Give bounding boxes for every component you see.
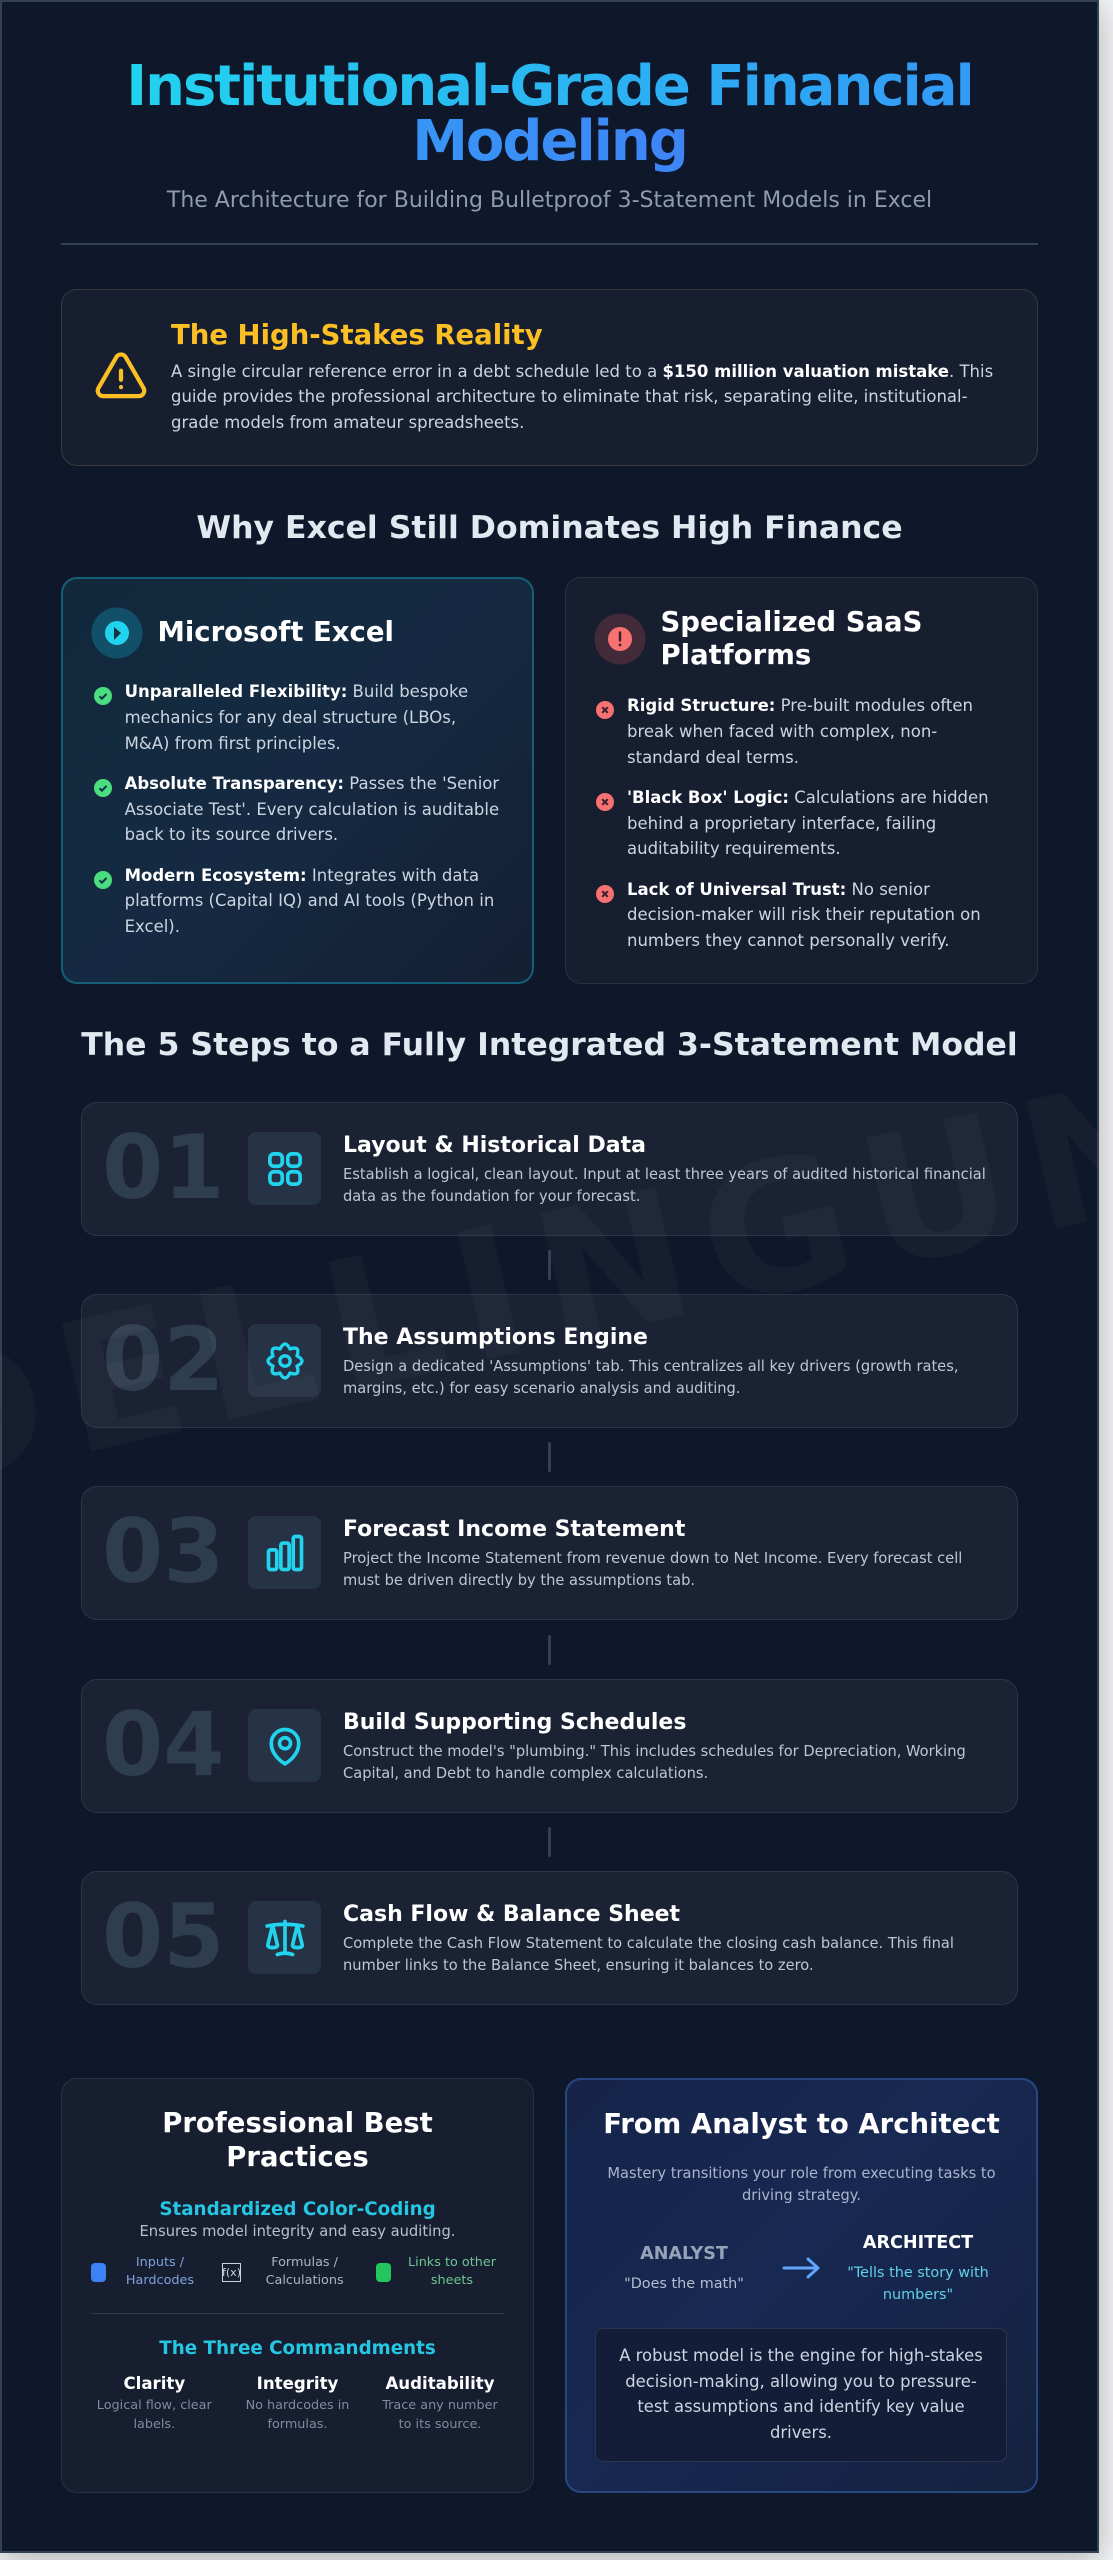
- step description: margins, etc.) for easy scenario analysis and auditing.: [343, 1380, 741, 1397]
- item: unparalleled flexibility: mechanics for any deal structure (LBOs,: [125, 708, 456, 727]
- heading: from analyst to architect: From Analyst to Architect: [603, 2108, 1000, 2140]
- text: tells the story: "Tells the story with: [847, 2265, 989, 2281]
- step description: data as the foundation for your forecast.: [343, 1188, 640, 1205]
- number 04: 04: [102, 1693, 224, 1796]
- heading: why excel still dominates: Why Excel Still Dominates High Finance: [196, 510, 903, 546]
- icon: excel badge: [92, 608, 142, 658]
- step 4: [81, 1679, 1018, 1813]
- legend label: inputs: Inputs /: [136, 2255, 184, 2270]
- arrow: analyst to architect: [782, 2257, 820, 2279]
- item: absolute transparency: Absolute Transparency: Passes the 'Senior: [125, 774, 499, 793]
- panel: specialized saas platforms: [565, 577, 1038, 984]
- item: rigid structure: break when faced with complex, non-: [627, 722, 937, 741]
- commandment: clarity: Clarity: [123, 2374, 185, 2393]
- panel: professional best practices: [61, 2078, 534, 2493]
- step title: Cash Flow & Balance Sheet: [343, 1902, 680, 1926]
- step description: Establish a logical, clean layout. Input at least three years of audited historical financial: [343, 1166, 986, 1183]
- step title: Build Supporting Schedules: [343, 1710, 686, 1734]
- heading: specialized saas platforms: [660, 606, 922, 671]
- step title: Layout & Historical Data: [343, 1132, 646, 1158]
- subheading: the three commandments: The Three Commandments: [159, 2338, 436, 2359]
- item: unparalleled flexibility: M&A) from first principles.: [125, 734, 341, 753]
- text: ensures model integrity: Ensures model integrity and easy auditing.: [140, 2223, 455, 2240]
- item: black box logic: [596, 788, 989, 858]
- commandment: auditability: Auditability: [385, 2374, 495, 2393]
- text: tells the story: numbers": [883, 2287, 953, 2303]
- text: tells the story: [847, 2265, 989, 2303]
- legend label: inputs: Hardcodes: [126, 2273, 194, 2288]
- legend icon: formula box: [222, 2263, 241, 2282]
- commandment text: auditability: [382, 2398, 498, 2432]
- legend label: links: sheets: [431, 2273, 473, 2288]
- number 03: 03: [102, 1500, 224, 1603]
- icon: warning triangle: [96, 352, 146, 398]
- callout: robust model: test assumptions and identify key value: [637, 2397, 965, 2416]
- callout: robust model: A robust model is the engine for high-stakes: [619, 2346, 983, 2365]
- item: unparalleled flexibility: [94, 682, 468, 753]
- subheading: standardized color-coding: Standardized Color-Coding: [159, 2199, 436, 2220]
- step description: Complete the Cash Flow Statement to calculate the closing cash balance. This final: [343, 1935, 954, 1952]
- item: lack of universal trust: Lack of Universal Trust: No senior: [627, 880, 930, 899]
- callout: robust model: decision-making, allowing you to pressure-: [625, 2372, 977, 2391]
- step description: Design a dedicated 'Assumptions' tab. This centralizes all key drivers (growth rates,: [343, 1358, 958, 1375]
- item: modern ecosystem: [94, 866, 494, 936]
- callout: robust model: [595, 2328, 1007, 2462]
- item: rigid structure: Rigid Structure: Pre-built modules often: [627, 696, 973, 715]
- commandment text: clarity: [97, 2398, 212, 2432]
- legend icon: formula box: f(x): [222, 2266, 241, 2279]
- icon: gear: [248, 1324, 321, 1397]
- title: Modeling: [412, 109, 687, 174]
- item: lack of universal trust: [596, 880, 981, 950]
- commandment text: integrity: [246, 2398, 349, 2432]
- commandment text: auditability: Trace any number: [382, 2398, 498, 2413]
- item: lack of universal trust: numbers they cannot personally verify.: [627, 931, 950, 950]
- item: lack of universal trust: decision-maker will risk their reputation on: [627, 905, 981, 924]
- legend label: links: [408, 2255, 496, 2288]
- step description: Capital, and Debt to handle complex calculations.: [343, 1765, 708, 1782]
- step 5: [81, 1871, 1018, 2005]
- step description: [343, 1166, 986, 1205]
- step description: must be driven directly by the assumptions tab.: [343, 1572, 695, 1589]
- label: architect: ARCHITECT: [863, 2233, 973, 2253]
- number 01: 01: [102, 1116, 224, 1219]
- heading: specialized saas platforms: Specialized SaaS: [660, 606, 922, 638]
- heading: specialized saas platforms: Platforms: [660, 639, 811, 671]
- number 05: 05: [102, 1885, 224, 1988]
- panel: the high-stakes reality: [61, 289, 1038, 466]
- icon: saas warning badge: [594, 614, 646, 664]
- heading: microsoft excel: Microsoft Excel: [158, 616, 394, 648]
- heading: professional best practices: Professional Best: [162, 2107, 433, 2139]
- item: unparalleled flexibility: Unparalleled Flexibility: Build bespoke: [125, 682, 468, 701]
- text: reality description: A single circular reference error in a debt schedule led to a $150 million valuation mistake. This: [171, 362, 993, 380]
- label: analyst: ANALYST: [640, 2244, 728, 2264]
- heading: the 5 steps: The 5 Steps to a Fully Integrated 3-Statement Model: [81, 1027, 1018, 1063]
- panel: microsoft excel: [61, 577, 534, 984]
- item: rigid structure: standard deal terms.: [627, 748, 799, 767]
- step title: The Assumptions Engine: [343, 1324, 648, 1350]
- text: reality description: grade models from amateur spreadsheets.: [171, 413, 524, 432]
- item: modern ecosystem: Excel).: [125, 917, 180, 936]
- item: modern ecosystem: Modern Ecosystem: Integrates with data: [125, 866, 479, 885]
- item: rigid structure: [596, 696, 973, 767]
- step description: number links to the Balance Sheet, ensuring it balances to zero.: [343, 1957, 814, 1974]
- text: reality description: [171, 362, 993, 432]
- commandment: integrity: Integrity: [257, 2374, 338, 2393]
- step 2: [81, 1294, 1018, 1428]
- text: mastery: Mastery transitions your role from executing tasks to: [607, 2165, 996, 2182]
- commandment text: auditability: to its source.: [399, 2417, 481, 2432]
- item: absolute transparency: [94, 774, 500, 844]
- number 02: 02: [102, 1308, 224, 1411]
- heading: the high-stakes reality: The High-Stakes Reality: [171, 318, 543, 350]
- step description: [343, 1358, 958, 1397]
- legend label: formulas: Calculations: [266, 2273, 344, 2288]
- title: [126, 54, 973, 174]
- text: reality description: guide provides the professional architecture to eliminate that risk, separating elite, institutional-: [171, 387, 968, 406]
- item: black box logic: auditability requirements.: [627, 839, 841, 858]
- commandment text: integrity: No hardcodes in: [246, 2398, 349, 2413]
- title: Institutional-Grade Financial: [126, 54, 973, 119]
- commandment text: clarity: labels.: [133, 2417, 175, 2432]
- legend label: links: Links to other: [408, 2255, 496, 2270]
- item: black box logic: behind a proprietary interface, failing: [627, 814, 936, 833]
- step description: [343, 1550, 962, 1589]
- icon: scales: [248, 1901, 321, 1974]
- item: absolute transparency: back to its source drivers.: [125, 825, 338, 844]
- subtitle: The Architecture for Building Bulletproof 3-Statement Models in Excel: [167, 188, 932, 213]
- legend swatch: inputs: [91, 2263, 106, 2282]
- step description: [343, 1743, 966, 1782]
- heading: professional best practices: [162, 2107, 433, 2173]
- item: modern ecosystem: platforms (Capital IQ) and AI tools (Python in: [125, 891, 494, 910]
- icon: grid squares: [248, 1132, 321, 1205]
- commandment text: integrity: formulas.: [267, 2417, 328, 2432]
- item: absolute transparency: Associate Test'. Every calculation is auditable: [125, 800, 499, 819]
- text: mastery: [607, 2165, 996, 2204]
- panel: from analyst to architect: [565, 2078, 1038, 2493]
- heading: professional best practices: Practices: [226, 2141, 369, 2173]
- commandment text: clarity: Logical flow, clear: [97, 2398, 212, 2413]
- step 1: [81, 1102, 1018, 1236]
- item: black box logic: 'Black Box' Logic: Calculations are hidden: [627, 788, 989, 807]
- legend label: formulas: Formulas /: [271, 2255, 338, 2270]
- text: does the math: "Does the math": [624, 2276, 744, 2292]
- icon: bar chart: [248, 1516, 321, 1589]
- legend label: formulas: [266, 2255, 344, 2288]
- step description: [343, 1935, 954, 1974]
- legend label: inputs: [126, 2255, 194, 2288]
- legend swatch: links: [376, 2263, 391, 2282]
- step description: Construct the model's "plumbing." This includes schedules for Depreciation, Working: [343, 1743, 966, 1760]
- step 3: [81, 1486, 1018, 1620]
- icon: map pin: [248, 1709, 321, 1782]
- step title: Forecast Income Statement: [343, 1516, 685, 1542]
- text: mastery: driving strategy.: [742, 2187, 861, 2204]
- callout: robust model: drivers.: [770, 2423, 832, 2442]
- step description: Project the Income Statement from revenue down to Net Income. Every forecast cell: [343, 1550, 962, 1567]
